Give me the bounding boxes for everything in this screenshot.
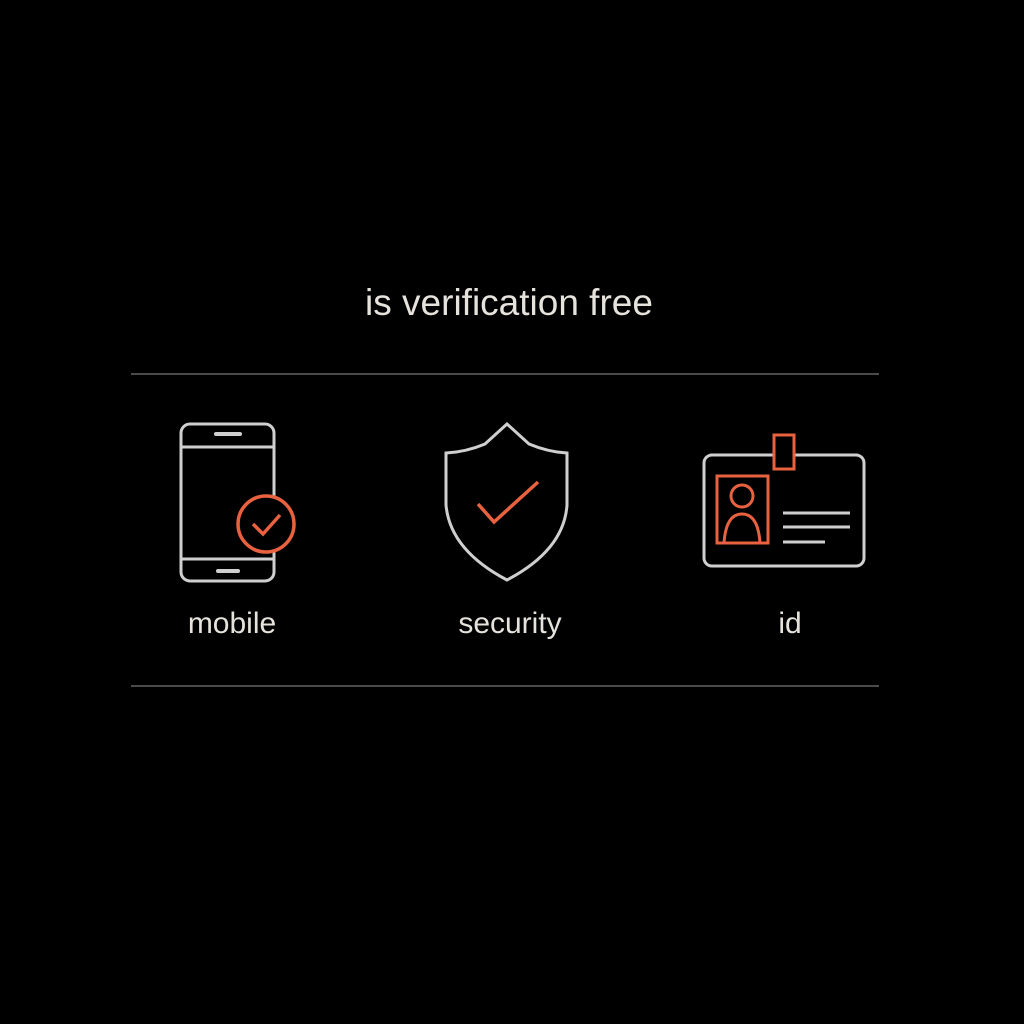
icon: mobile	[180, 422, 296, 582]
divider top	[131, 373, 879, 375]
icon: id card	[702, 434, 866, 568]
icon: security shield	[444, 422, 568, 582]
label: security: security	[458, 607, 562, 640]
label: mobile: mobile	[188, 607, 276, 640]
title: is verification free	[365, 282, 653, 323]
label: id: id	[778, 607, 802, 640]
divider bottom	[131, 685, 879, 687]
